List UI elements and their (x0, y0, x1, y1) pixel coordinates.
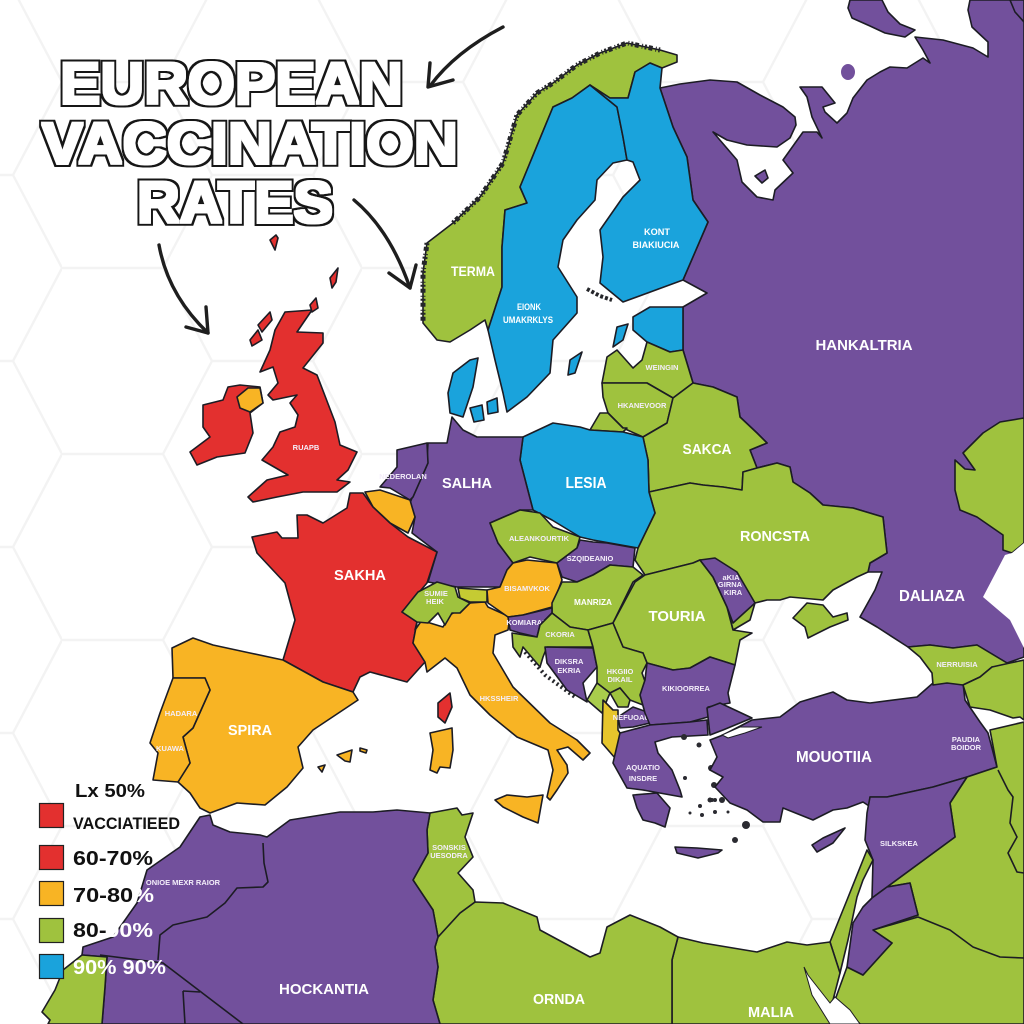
country: Turkey: BOIDOR (951, 743, 982, 752)
legend label: vaccinated: VACCIATIEED (73, 815, 180, 833)
country: Sweden: UMAKRKLYS (503, 315, 553, 325)
legend label: 80-90: 80-90% (73, 920, 153, 942)
country: Sweden: EIONK (517, 302, 541, 312)
country: Syria: SILKSKEA (880, 839, 919, 848)
country: Italy (413, 602, 590, 800)
country: Poland (520, 423, 655, 548)
country: Tunisia: UESODRA (430, 851, 468, 860)
Kaliningrad (590, 413, 627, 432)
country: Algeria and Morocco: HOCKANTIA (279, 981, 369, 998)
country: Denmark (448, 358, 498, 422)
legend swatch: 90 (40, 954, 64, 978)
country: Greece: AQUATIO (626, 763, 660, 772)
country: Bulgaria (640, 657, 735, 725)
country: Slovenia (506, 608, 552, 637)
country: Georgia: NERRUISIA (936, 660, 978, 669)
country: Sweden (488, 85, 627, 412)
country: Hungary: MANRIZA (574, 597, 612, 607)
country: Great Britain (248, 310, 357, 502)
title: RATES (137, 170, 333, 236)
country: Lithuania: HKANEVOOR (618, 401, 667, 410)
country: Switzerland: HEIK (426, 597, 445, 606)
country: Libya: ORNDA (533, 991, 585, 1008)
Sea of Marmara (722, 727, 762, 738)
country: Greece: INSDRE (629, 774, 657, 783)
country: Bosnia: DIKSRA (555, 657, 584, 666)
title (42, 52, 458, 236)
country: North Macedonia (613, 707, 656, 728)
country: Portugal: KUAWA (156, 744, 185, 753)
country: France (252, 493, 437, 692)
Crimea (793, 603, 848, 638)
country: Croatia (512, 613, 593, 667)
country: North Macedonia: NEFUOAUA (613, 713, 656, 722)
country: Poland: LESIA (566, 475, 606, 492)
Scottish islands (250, 235, 338, 346)
country: Norway (423, 43, 677, 342)
Adriatic islands (525, 652, 575, 697)
country: Portugal: HADARA (165, 709, 198, 718)
country: Romania: TOURIA (648, 608, 706, 625)
country: Turkey: MOUOTIIA (796, 749, 872, 766)
Northern Ireland (237, 388, 263, 412)
country: Turkey: PAUDIA (952, 735, 981, 744)
country: Austria (487, 560, 562, 617)
Middle East green (835, 722, 1024, 1024)
legend label: 90: 90% 90% (73, 957, 166, 979)
country: Moldova (700, 558, 755, 623)
country: Netherlands: NEDEROLAN (379, 472, 427, 481)
country: Jordan (847, 883, 918, 975)
country: Finland (590, 63, 708, 302)
country: Serbia: DIKAIL (608, 675, 633, 684)
Corsica (438, 693, 452, 723)
country: Belarus (643, 383, 767, 492)
country: Austria: BISAMVKOK (504, 584, 550, 593)
country: Moldova: KIRA (724, 588, 743, 597)
Western Sahara (42, 955, 107, 1024)
country: Albania (602, 700, 627, 758)
country: Russia: DALIAZA (899, 588, 965, 605)
country: Tunisia: SONSKIS (432, 843, 466, 852)
title: EUROPEAN (60, 52, 403, 116)
country: Ireland (190, 385, 263, 465)
legend (40, 781, 180, 979)
Sardinia (430, 728, 453, 773)
country: Spain (172, 638, 358, 813)
Aegean islands (681, 734, 750, 843)
country: Netherlands (379, 443, 428, 500)
country: Syria (865, 777, 967, 898)
country: Kazakhstan (955, 418, 1024, 553)
Aland archipelago (587, 289, 612, 300)
Norway jagged coast (423, 43, 660, 323)
country: Russia: HANKALTRIA (816, 338, 913, 354)
country: Croatia: CKORIA (545, 630, 575, 639)
Cyprus (812, 828, 845, 852)
country: Czechia (490, 510, 580, 563)
country: Italy: HKSSHEIR (480, 694, 519, 703)
Arctic islands (755, 0, 1024, 183)
country: Estonia (633, 307, 683, 352)
country: Bulgaria: KIKIOORREA (662, 684, 711, 693)
arrow: to Ireland (159, 245, 208, 333)
country: Romania (613, 560, 752, 670)
country: Slovakia (557, 540, 635, 582)
country: France: SAKHA (334, 567, 386, 584)
country: Hungary (552, 565, 643, 630)
country: Lithuania (602, 383, 673, 437)
country: Russia (660, 0, 1024, 663)
country: Latvia: WEINGIN (646, 363, 678, 372)
Baltic islands (568, 324, 628, 375)
Israel and Lebanon (830, 850, 873, 973)
country: Tunisia (413, 808, 475, 937)
country: Finland: BIAKIUCIA (632, 240, 680, 251)
country: Turkey (710, 683, 997, 822)
country: Slovenia: KOMIARAK (506, 618, 548, 627)
Red Sea gulf (804, 967, 860, 1024)
country: Latvia (602, 342, 693, 398)
country: Montenegro (587, 683, 610, 713)
country: Finland: KONT (644, 227, 670, 238)
country: Libya (433, 902, 678, 1024)
country: Switzerland: SUMIE (424, 589, 448, 598)
country: Bosnia (545, 647, 597, 702)
country: Egypt (672, 937, 860, 1024)
country: Serbia: HKGIIO (607, 667, 633, 676)
legend label: 70-80: 70-80 % (73, 885, 154, 907)
country: Portugal (150, 678, 210, 782)
country: Germany (410, 417, 533, 587)
country: Moldova: aKIA (722, 573, 740, 582)
country: Great Britain: RUAPB (293, 443, 320, 452)
Thrace (707, 703, 752, 735)
Tyrol strip (458, 588, 487, 602)
country: Norway: TERMA (451, 263, 495, 279)
legend label: 60-70: 60-70% (73, 848, 153, 870)
country: Moldova: GIRNA (718, 580, 743, 589)
legend swatch: 70-80 (40, 882, 64, 906)
country: Georgia (908, 645, 1010, 685)
arrow: to Scandinavia (428, 27, 503, 87)
country: Algeria and Morocco (82, 810, 440, 1024)
title: VACCINATION (42, 112, 458, 176)
country: Belgium (365, 490, 415, 533)
country: Caucasus (963, 660, 1024, 720)
Sicily (495, 795, 543, 823)
Caspian Sea (983, 543, 1024, 648)
country: Greece (613, 720, 722, 858)
country: Algeria and Morocco: ONIOE MEXR RAIOR (146, 878, 221, 887)
country: Germany: SALHA (442, 475, 492, 492)
country: Spain: SPIRA (228, 723, 273, 739)
country: Slovakia: SZQIDEANIO (567, 554, 614, 563)
legend swatch: 80-90 (40, 918, 64, 942)
legend swatch: 60-70 (40, 846, 64, 870)
country: Ukraine: RONCSTA (740, 528, 810, 545)
country: Bosnia: EKRIA (557, 666, 581, 675)
country: Ukraine (635, 463, 887, 630)
country: Serbia (588, 623, 650, 705)
country: Czechia: ALEANKOURTIK (509, 534, 570, 543)
arrow: to Norway (354, 200, 416, 288)
country: Kosovo (610, 688, 630, 707)
Balearic islands (318, 748, 367, 772)
country: Switzerland (402, 582, 470, 625)
country: Belarus: SAKCA (682, 441, 732, 458)
country: Egypt: MALIA (748, 1004, 794, 1021)
legend label: under 50: Lx 50% (75, 781, 145, 801)
legend swatch: red (40, 804, 64, 828)
